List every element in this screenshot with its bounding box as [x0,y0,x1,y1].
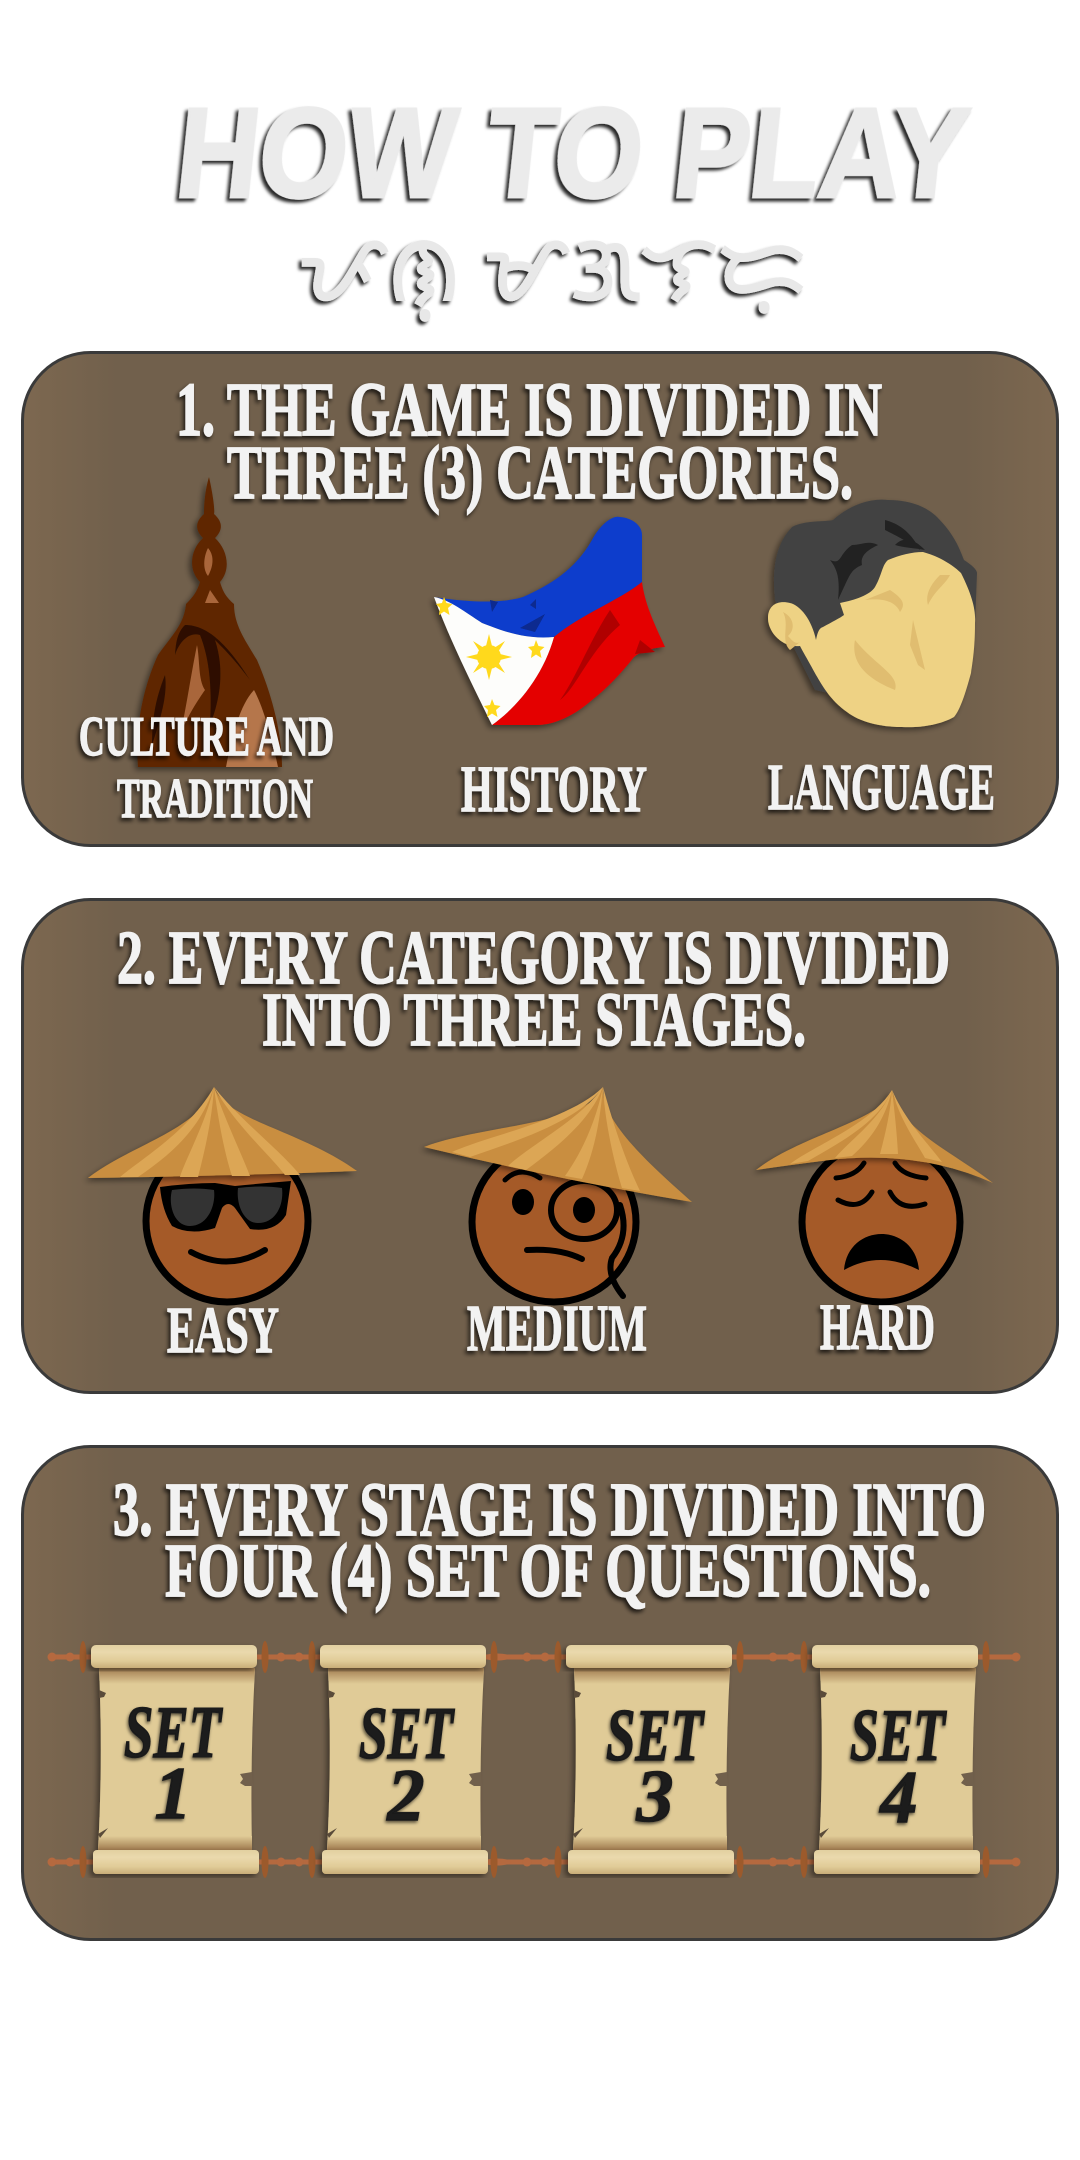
scroll: set 1 [48,1641,268,1878]
heading: step 3 [113,1468,986,1613]
heading: step 2: INTO THREE STAGES. [262,978,806,1062]
icon: face with black hair [768,500,977,727]
label: culture and tradition: TRADITION [117,768,313,830]
panel 1: three categories [22,352,1058,846]
icon: hard face crying with hat [756,1090,993,1302]
icon: philippine flag [434,517,665,725]
scroll: set 1: 1 [154,1753,192,1835]
panel 2: three stages [22,900,1058,1392]
icon: brown tower [137,477,282,767]
panel 3: four question sets [22,1446,1058,1940]
label: history: HISTORY [461,753,647,826]
label: culture and tradition [79,706,334,830]
scroll: set 2 [276,1641,498,1878]
scroll: set 4: 4 [878,1757,918,1839]
scroll: set 2: 2 [386,1755,424,1837]
label: culture and tradition: CULTURE AND [79,706,334,768]
subtitle: baybayin script: ᜉᜈᜓ ᜋᜄᜎᜇᜓ [298,218,806,321]
scroll rods [52,1652,1020,1866]
scroll: set 4: SET [850,1695,947,1777]
scroll: set 2: SET [359,1693,455,1775]
title: how to play: HOW TO PLAY [170,82,975,225]
scroll: set 1: SET [124,1692,223,1774]
heading: step 1 [176,368,882,515]
label: medium: MEDIUM [467,1292,647,1365]
scroll: set 3: SET [606,1695,705,1777]
icon: medium face with monocle and hat [424,1087,692,1302]
label: hard: HARD [820,1291,935,1364]
scroll: set 3: 3 [636,1756,674,1838]
label: easy: EASY [167,1294,279,1367]
heading: step 2 [117,916,950,1062]
scroll: set 4 [768,1641,990,1878]
scroll: set 3 [522,1641,744,1878]
icon: easy face with sunglasses and hat [88,1087,357,1302]
